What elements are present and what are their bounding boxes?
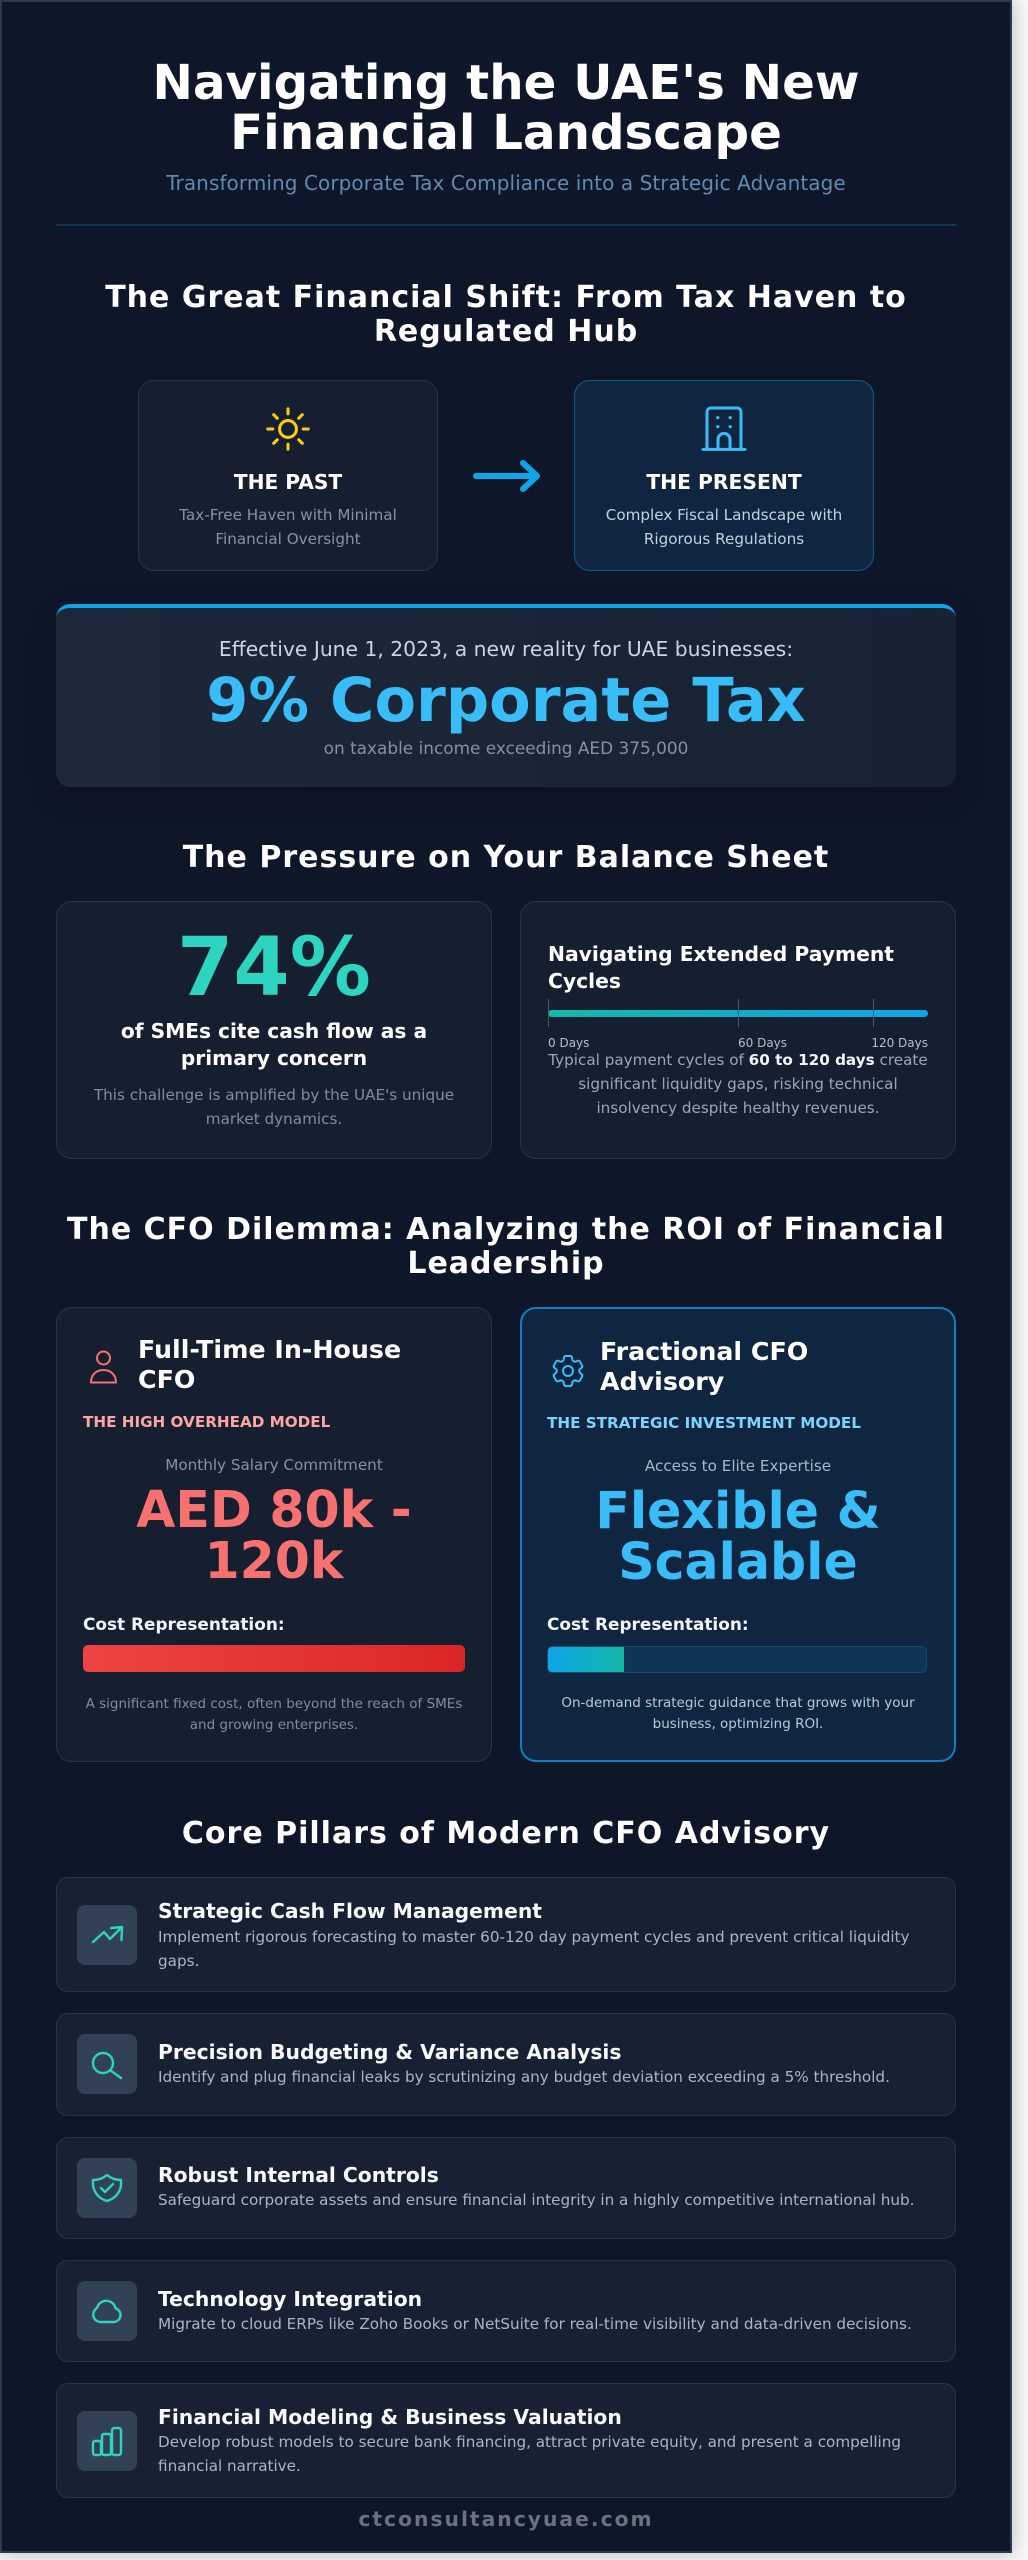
card heading <box>600 1337 808 1396</box>
description: significant liquidity gaps, risking technical <box>578 1075 898 1093</box>
salary value: 120k <box>204 1531 344 1590</box>
pillar description: gaps. <box>158 1952 199 1970</box>
pillar description: Develop robust models to secure bank financing, attract private equity, and present a compelling <box>158 2433 901 2451</box>
pillar description: Safeguard corporate assets and ensure financial integrity in a highly competitive international hub. <box>158 2191 914 2209</box>
flexible value: Flexible & <box>595 1481 881 1540</box>
cost label: Cost Representation: <box>547 1614 749 1634</box>
description: the past: Tax-Free Haven with Minimal <box>179 506 397 524</box>
title <box>153 55 859 161</box>
arrow <box>473 460 540 492</box>
pillar title: Financial Modeling & Business Valuation <box>158 2405 622 2429</box>
panel: the past <box>138 380 438 571</box>
pillar: cash flow <box>56 1877 956 1992</box>
icon: building <box>702 406 746 451</box>
panel: 9% corporate tax callout <box>56 604 956 787</box>
icon: gear <box>552 1355 584 1387</box>
cost note <box>86 1696 462 1733</box>
description: the past <box>179 506 397 548</box>
pillar title: Technology Integration <box>158 2287 422 2311</box>
panel: 74% stat <box>56 901 492 1159</box>
card tag: THE STRATEGIC INVESTMENT MODEL <box>547 1414 861 1432</box>
pillar title: Strategic Cash Flow Management <box>158 1899 542 1923</box>
icon: bar chart <box>77 2411 137 2471</box>
title: Navigating the UAE's New <box>153 55 859 111</box>
salary value: AED 80k - <box>136 1480 412 1539</box>
tax rate: 9% Corporate Tax <box>206 666 806 736</box>
card heading: Full-Time In-House <box>138 1335 401 1364</box>
stat value: 74% <box>177 921 371 1015</box>
icon: person <box>90 1350 117 1384</box>
title: Financial Landscape <box>230 105 782 161</box>
heading: cfo dilemma: The CFO Dilemma: Analyzing the ROI of Financial <box>67 1212 945 1247</box>
cost note: business, optimizing ROI. <box>653 1716 823 1732</box>
icon: magnifier <box>77 2034 137 2094</box>
timeline chart <box>548 999 928 1050</box>
threshold: on taxable income exceeding AED 375,000 <box>324 738 688 758</box>
stat label <box>121 1019 427 1070</box>
panel: full-time in-house cfo <box>56 1307 492 1762</box>
salary label: Monthly Salary Commitment <box>165 1456 383 1474</box>
effective date: Effective June 1, 2023, a new reality for UAE businesses: <box>219 637 793 661</box>
stat label: of SMEs cite cash flow as a <box>121 1019 427 1043</box>
cost note: and growing enterprises. <box>190 1717 358 1733</box>
footer: ctconsultancyuae.com <box>358 2507 654 2531</box>
pillar title: Precision Budgeting & Variance Analysis <box>158 2040 621 2064</box>
panel: the present <box>574 380 874 571</box>
stat label: primary concern <box>181 1046 367 1070</box>
timeline chart: 120 Days <box>871 1036 928 1050</box>
card heading: Advisory <box>600 1367 724 1396</box>
stat note <box>94 1086 454 1128</box>
heading <box>548 942 894 993</box>
pillar: internal controls <box>56 2137 956 2239</box>
icon: trend up <box>77 1905 137 1965</box>
pillar description <box>158 1928 910 1970</box>
heading: cfo dilemma <box>67 1212 945 1281</box>
description: insolvency despite healthy revenues. <box>596 1099 880 1117</box>
cost bar track <box>547 1646 927 1673</box>
heading: the great financial shift: Regulated Hub <box>374 314 638 349</box>
pillar: technology <box>56 2260 956 2362</box>
label: the past: THE PAST <box>234 470 342 494</box>
cost label: Cost Representation: <box>83 1614 285 1634</box>
pillar description: Identify and plug financial leaks by scrutinizing any budget deviation exceeding a 5% threshold. <box>158 2068 890 2086</box>
pillar description: financial narrative. <box>158 2457 301 2475</box>
heading: Navigating Extended Payment <box>548 942 894 966</box>
card heading: CFO <box>138 1365 195 1394</box>
header divider <box>56 224 956 226</box>
cost note: A significant fixed cost, often beyond the reach of SMEs <box>86 1696 462 1712</box>
description: the present <box>606 506 842 548</box>
pillar: modeling <box>56 2383 956 2498</box>
salary value <box>136 1480 412 1590</box>
panel: fractional cfo advisory <box>520 1307 956 1762</box>
pillar description <box>158 2433 901 2475</box>
heading: core pillars: Core Pillars of Modern CFO Advisory <box>182 1816 830 1851</box>
heading: the great financial shift <box>105 280 907 349</box>
heading: the great financial shift: The Great Financial Shift: From Tax Haven to <box>105 280 907 315</box>
cost note <box>561 1695 915 1732</box>
expertise label: Access to Elite Expertise <box>645 1457 831 1475</box>
heading: cfo dilemma: Leadership <box>407 1246 605 1281</box>
cost note: On-demand strategic guidance that grows with your <box>561 1695 915 1711</box>
pillar: budgeting <box>56 2013 956 2116</box>
description: the present: Rigorous Regulations <box>644 530 804 548</box>
subtitle: Transforming Corporate Tax Compliance into a Strategic Advantage <box>166 171 846 195</box>
pillar description: Migrate to cloud ERPs like Zoho Books or NetSuite for real-time visibility and data-driven decisions. <box>158 2315 912 2333</box>
stat note: market dynamics. <box>206 1110 342 1128</box>
icon: cloud <box>77 2281 137 2341</box>
heading: Cycles <box>548 969 621 993</box>
stat note: This challenge is amplified by the UAE's unique <box>94 1086 454 1104</box>
card heading: Fractional CFO <box>600 1337 808 1366</box>
description: the present: Complex Fiscal Landscape with <box>606 506 842 524</box>
icon: shield <box>77 2158 137 2218</box>
icon: sun <box>266 407 310 451</box>
timeline chart: 0 Days <box>548 1036 589 1050</box>
timeline bar <box>548 1010 928 1017</box>
description <box>548 1051 928 1117</box>
card heading <box>138 1335 401 1394</box>
timeline chart: 60 Days <box>738 1036 787 1050</box>
description: the past: Financial Oversight <box>215 530 361 548</box>
pillar title: Robust Internal Controls <box>158 2163 439 2187</box>
flexible value: Scalable <box>618 1532 858 1591</box>
pillar description: Implement rigorous forecasting to master 60-120 day payment cycles and prevent critical liquidity <box>158 1928 910 1946</box>
description: Typical payment cycles of 60 to 120 days create <box>548 1051 928 1069</box>
panel: payment cycles <box>520 901 956 1159</box>
card tag: THE HIGH OVERHEAD MODEL <box>83 1413 330 1431</box>
heading: pressure on balance sheet: The Pressure on Your Balance Sheet <box>183 840 829 875</box>
flexible value <box>595 1481 881 1591</box>
cost bar fill <box>547 1646 624 1673</box>
cost bar <box>83 1645 465 1672</box>
label: the present: THE PRESENT <box>646 470 802 494</box>
